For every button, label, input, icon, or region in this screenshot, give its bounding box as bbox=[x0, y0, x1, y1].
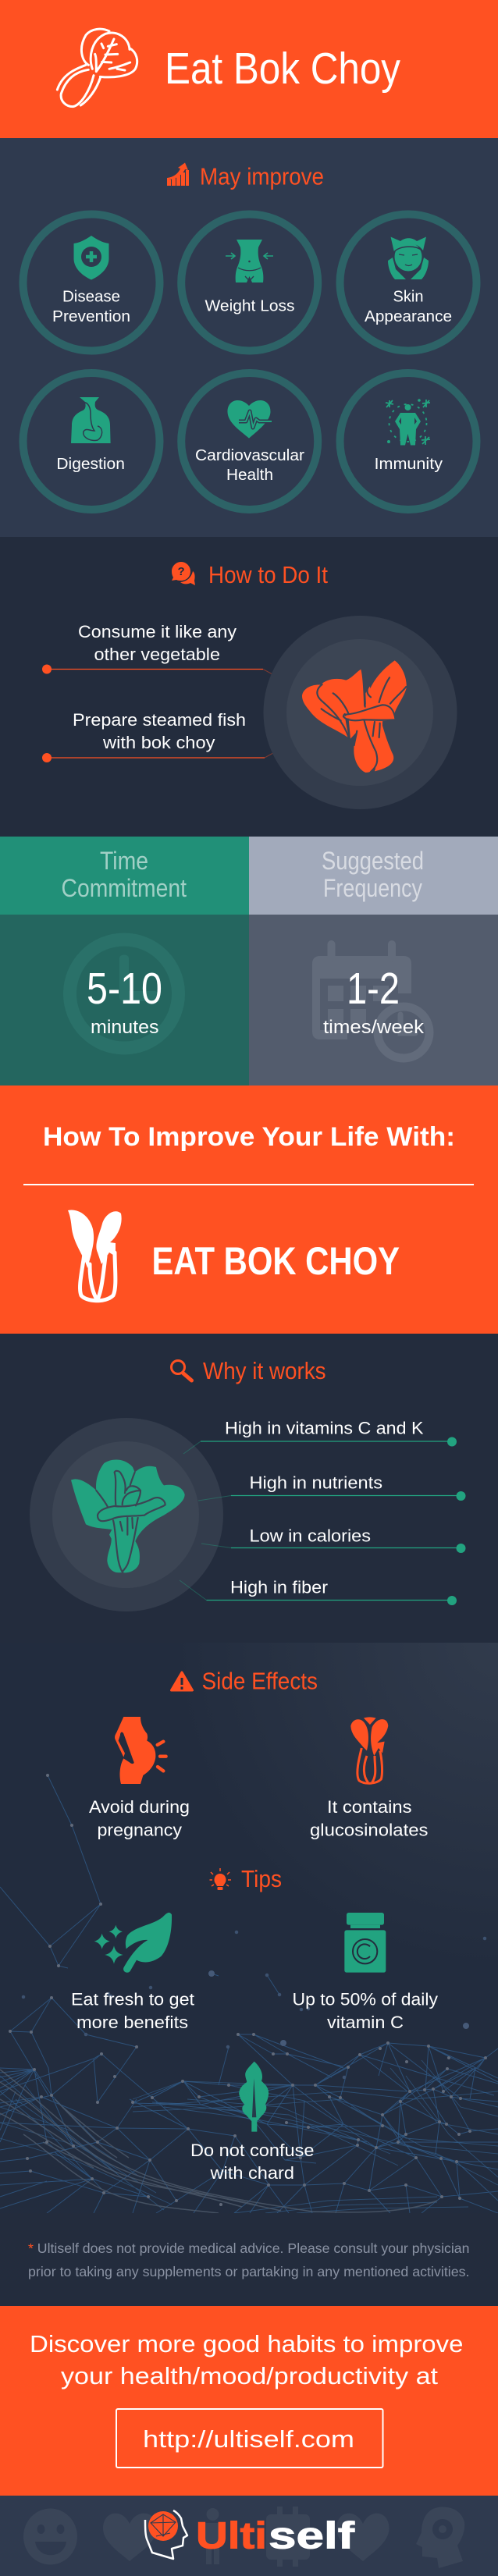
text: consume: other vegetable bbox=[94, 645, 220, 664]
label: Health bbox=[226, 466, 273, 484]
panel: call to action bbox=[0, 2306, 498, 2496]
label: Immunity bbox=[375, 455, 443, 473]
icon: protected figure bbox=[386, 399, 430, 445]
ring: skin appearance bbox=[340, 214, 476, 351]
heading: time commitment: Time bbox=[100, 847, 148, 875]
icon: shield bbox=[73, 236, 109, 279]
label: Prevention bbox=[52, 307, 130, 325]
icon: leaf with sparkles bbox=[94, 1913, 172, 1973]
item: vitamins: High in vitamins C and K bbox=[225, 1419, 424, 1437]
text: do not confuse: with chard bbox=[209, 2163, 294, 2183]
icon: question bubbles bbox=[172, 562, 195, 585]
icon: heart pulse bbox=[227, 400, 272, 439]
text: medical disclaimer: prior to taking any supplements or partaking in any mentioned activities. bbox=[28, 2264, 470, 2279]
ring: weight loss bbox=[181, 214, 318, 351]
url button: http://ultiself.com bbox=[143, 2425, 354, 2453]
heading: why it works: Why it works bbox=[203, 1357, 326, 1384]
icon: chard leaf bbox=[239, 2062, 269, 2132]
value: 1-2 times per week: 1-2 bbox=[347, 964, 400, 1014]
watermark icons bbox=[23, 2507, 464, 2568]
label: Digestion bbox=[56, 455, 125, 473]
title: Eat Bok Choy bbox=[165, 44, 400, 94]
item: calories: Low in calories bbox=[250, 1526, 371, 1545]
icon: white bok choy bbox=[68, 1210, 122, 1301]
logo head and brain bbox=[145, 2510, 187, 2559]
panel: disclaimer bbox=[0, 2213, 498, 2306]
icon: face with hands bbox=[388, 237, 429, 279]
text: up to 50 percent: vitamin C bbox=[327, 2013, 404, 2032]
icon: orange bok choy bbox=[302, 660, 407, 773]
circle badge with bok choy bbox=[264, 616, 457, 809]
value: 5-10 minutes bbox=[87, 964, 162, 1038]
text: glucosinolates: It contains bbox=[327, 1797, 412, 1817]
icon: orange bok choy small bbox=[350, 1717, 388, 1783]
label: Appearance bbox=[365, 307, 452, 325]
icon: waist with arrows bbox=[226, 240, 273, 282]
panel: how to do it bbox=[0, 537, 498, 837]
value: 5-10 minutes: 5-10 bbox=[87, 964, 162, 1014]
value: 1-2 times per week: times/week bbox=[323, 1017, 425, 1038]
panel: may improve bbox=[0, 138, 498, 537]
panel: footer bbox=[0, 2496, 498, 2576]
icon: calendar watermark bbox=[312, 940, 429, 1058]
logo: Ultiself bbox=[145, 2510, 355, 2559]
icon: light bulb bbox=[209, 1868, 231, 1890]
heading: how to do it: How to Do It bbox=[208, 561, 328, 588]
value: 1-2 times per week bbox=[323, 964, 425, 1038]
item: calories bbox=[201, 1526, 465, 1553]
text: do not confuse: Do not confuse bbox=[190, 2141, 314, 2160]
panel: suggested frequency bbox=[249, 837, 498, 1085]
url button bbox=[116, 2409, 382, 2468]
leader line 1 bbox=[42, 665, 283, 680]
leader line 2 bbox=[42, 745, 287, 762]
text: up to 50 percent: Up to 50% of daily bbox=[292, 1990, 438, 2009]
heading: suggested frequency: Suggested bbox=[322, 847, 424, 875]
text: discover more: your health/mood/productivity at bbox=[61, 2362, 438, 2389]
heading: eat bok choy: EAT BOK CHOY bbox=[151, 1239, 400, 1283]
icon: torso stomach bbox=[71, 397, 111, 443]
text: glucosinolates: glucosinolates bbox=[310, 1820, 428, 1840]
icon: question bubbles: ? bbox=[178, 565, 185, 578]
value: 5-10 minutes: minutes bbox=[91, 1017, 159, 1038]
icon: vitamin C jar bbox=[344, 1913, 386, 1973]
ring: cardiovascular health bbox=[181, 373, 318, 510]
item: fiber bbox=[180, 1578, 457, 1605]
heading: suggested frequency: Frequency bbox=[323, 874, 422, 902]
ring: immunity bbox=[340, 373, 476, 510]
icon: pregnancy bbox=[115, 1717, 166, 1784]
text: avoid during pregnancy: pregnancy bbox=[97, 1820, 182, 1840]
icon: magnifier bbox=[172, 1361, 192, 1380]
item: nutrients: High in nutrients bbox=[250, 1473, 382, 1492]
item: vitamins bbox=[183, 1419, 457, 1454]
label: Skin bbox=[393, 287, 423, 306]
logo wordmark: Ulti bbox=[196, 2516, 267, 2556]
icon: rising chart bbox=[167, 162, 189, 186]
item: fiber: High in fiber bbox=[230, 1578, 328, 1597]
circle badge with green bok choy bbox=[30, 1418, 223, 1611]
text: eat fresh: more benefits bbox=[76, 2013, 188, 2032]
label: Weight Loss bbox=[205, 297, 295, 315]
label: Disease bbox=[62, 287, 120, 306]
heading: may improve: May improve bbox=[200, 162, 324, 190]
panel: header bbox=[0, 0, 498, 138]
panel: why it works bbox=[0, 1334, 498, 1643]
text: consume: Consume it like any bbox=[78, 622, 237, 641]
logo wordmark: self bbox=[269, 2516, 355, 2556]
heading: tips: Tips bbox=[241, 1865, 282, 1892]
icon: warning triangle bbox=[172, 1672, 192, 1690]
text: prepare: Prepare steamed fish bbox=[73, 710, 246, 730]
network background bbox=[0, 1775, 498, 2213]
ring: disease prevention bbox=[23, 214, 159, 351]
icon: clock watermark bbox=[70, 940, 178, 1048]
heading: side effects: Side Effects bbox=[201, 1667, 318, 1695]
panel: how to improve banner bbox=[0, 1085, 498, 1334]
text: eat fresh: Eat fresh to get bbox=[71, 1990, 194, 2009]
heading: how to improve: How To Improve Your Life With: bbox=[43, 1122, 455, 1152]
text: medical disclaimer: * Ultiself does not provide medical advice. Please consult your physician bbox=[28, 2240, 464, 2256]
ring: digestion bbox=[23, 373, 159, 510]
icon: bok choy outline bbox=[57, 29, 137, 107]
heading: time commitment: Commitment bbox=[61, 874, 187, 902]
item: nutrients bbox=[198, 1473, 465, 1501]
icon: green bok choy bbox=[71, 1459, 185, 1572]
text: prepare: with bok choy bbox=[102, 733, 215, 752]
text: discover more: Discover more good habits to improve bbox=[30, 2330, 464, 2357]
label: Cardiovascular bbox=[195, 446, 304, 464]
text: avoid during pregnancy: Avoid during bbox=[89, 1797, 190, 1817]
panel: side effects and tips bbox=[0, 1643, 498, 2213]
panel: time commitment bbox=[0, 837, 249, 1085]
